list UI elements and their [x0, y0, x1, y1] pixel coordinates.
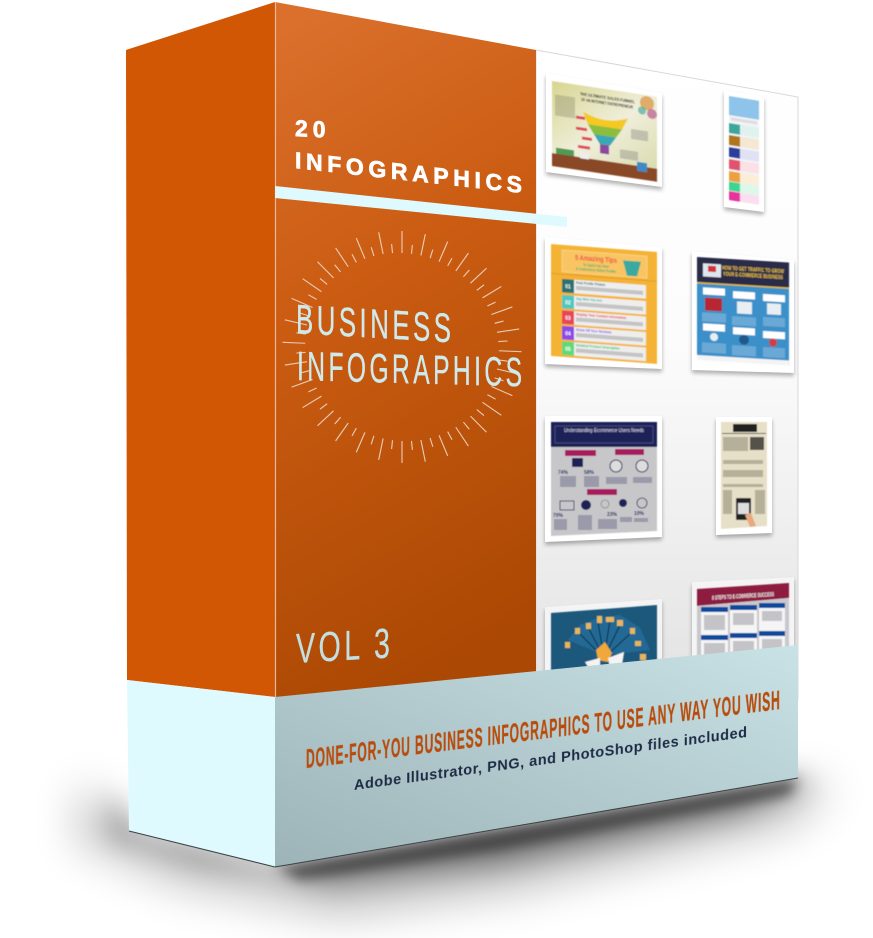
thumbnail: blue hub: [545, 599, 662, 680]
thumbnail: 5 amazing tips: E-Commerce Seller Profile: [576, 267, 616, 274]
thumbnail: 5 amazing tips: 01: [565, 284, 571, 290]
thumbnail: 5 amazing tips: Detailed Product Description: [576, 343, 620, 351]
heading: 20 infographics: [295, 115, 522, 198]
thumbnail: traffic: YOUR E-COMMERCE BUSINESS: [723, 272, 784, 281]
thumbnail: 5 amazing tips: Post Profile Picture: [576, 281, 606, 287]
thumbnail: traffic: [692, 251, 794, 376]
front orange panel: [275, 2, 536, 700]
thumbnail: 5 amazing tips: 5 Amazing Tips: [575, 253, 617, 265]
thumbnail: sales funnel: THE ULTIMATE SALES FUNNEL: [580, 91, 635, 104]
thumbnail: 5 amazing tips: Show Off Your Reviews: [576, 328, 612, 335]
sunburst rays: [283, 226, 521, 468]
thumbnail: ecommerce users needs: [545, 416, 662, 545]
banner headline: DONE-FOR-YOU BUSINESS INFOGRAPHICS TO USE ANY WAY YOU WISH: [306, 686, 780, 774]
ground shadow: [75, 778, 835, 915]
thumbnail: vertical list: [724, 90, 764, 215]
thumbnail: 8 steps: [692, 577, 794, 680]
heading: 20 infographics: INFOGRAPHICS: [295, 147, 522, 198]
thumbnail: ecommerce users needs: 23%: [607, 512, 618, 518]
thumbnail: 5 amazing tips: 03: [565, 316, 571, 322]
thumbnail: beige tablet: [716, 417, 772, 538]
volume label: VOL 3: [296, 619, 390, 672]
thumbnail: traffic: HOW TO GET TRAFFIC TO GROW: [722, 266, 784, 275]
title: business infographics: BUSINESS: [296, 297, 451, 352]
thumbnail: 5 amazing tips: Say Who You Are: [576, 297, 602, 303]
thumbnail: ecommerce users needs: Understanding Ecommerce Users Needs: [564, 428, 644, 434]
thumbnail: ecommerce users needs: 70%: [553, 513, 564, 519]
title: business infographics: INFOGRAPHICS: [297, 344, 522, 396]
front white panel: [536, 50, 798, 700]
accent bar: [275, 186, 567, 227]
title: business infographics: [296, 297, 522, 396]
bottom banner: [275, 645, 798, 867]
left side face: [126, 2, 275, 867]
thumbnail: ecommerce users needs: 74%: [558, 470, 569, 476]
edge highlight: [274, 2, 276, 697]
heading: 20 infographics: 20: [295, 115, 331, 143]
thumbnail: 8 steps: 8 STEPS TO E-COMMERCE SUCCESS: [712, 592, 774, 602]
thumbnail: 5 amazing tips: [545, 237, 662, 372]
thumbnail: sales funnel: [546, 73, 662, 190]
thumbnail: sales funnel: OF AN INTERNET ENTREPRENEUR: [581, 97, 633, 110]
thumbnail: 5 amazing tips: 02: [565, 300, 571, 306]
thumbnail: 5 amazing tips: Display Your Contact Information: [576, 312, 626, 320]
thumbnail: 5 amazing tips: 04: [565, 331, 571, 337]
thumbnail: 5 amazing tips: 05: [565, 347, 571, 353]
banner bottom edge: [275, 778, 798, 867]
banner subheading: Adobe Illustrator, PNG, and PhotoShop files included: [354, 725, 747, 794]
thumbnail: 5 amazing tips: To Spice Up Your: [583, 263, 610, 269]
thumbnail: ecommerce users needs: 58%: [584, 470, 595, 476]
thumbnail: ecommerce users needs: 10%: [634, 511, 645, 517]
